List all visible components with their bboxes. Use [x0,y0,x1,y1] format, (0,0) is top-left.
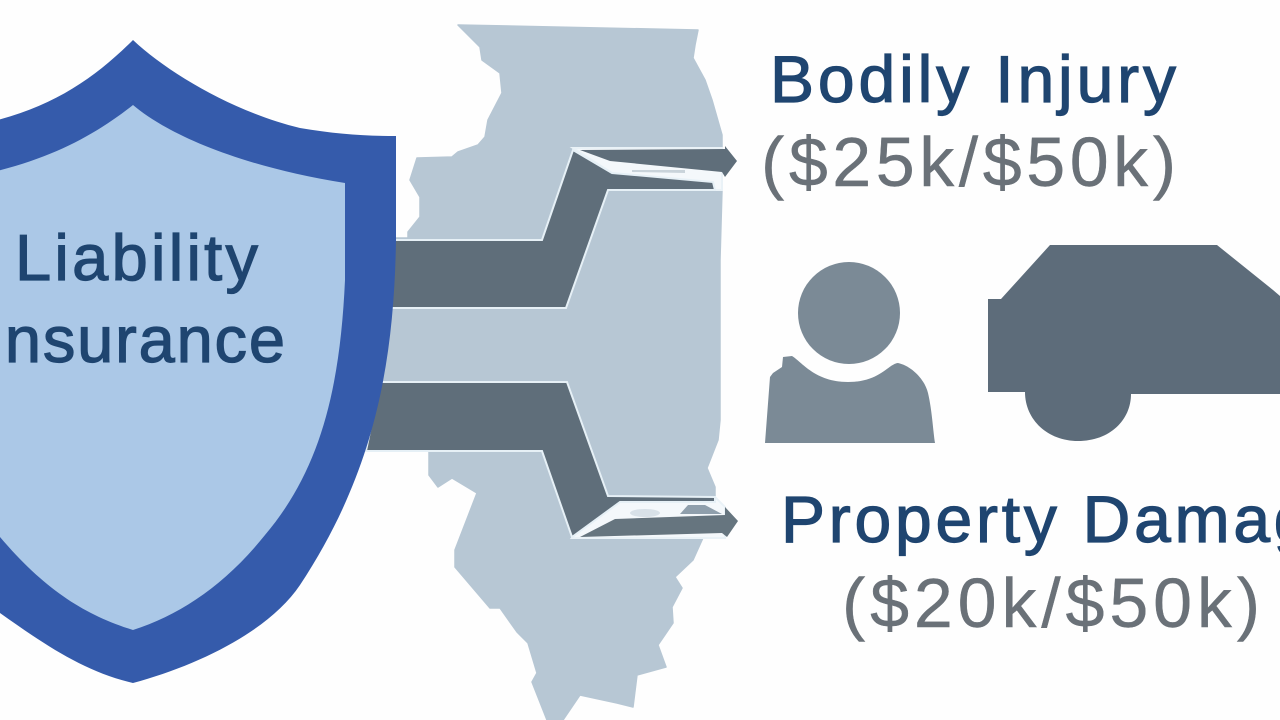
shield label: Liability: Liability [15,221,258,294]
Illinois state map [375,25,722,720]
icon: person [765,262,935,443]
shield: liability insurance [0,40,396,683]
heading: Bodily Injury: Bodily Injury [770,42,1176,116]
shield inner panel [0,105,345,630]
amount: property damage limits: ($20k/$50k) [842,564,1260,642]
arrow: upper path to bodily injury [380,146,737,308]
arrow: lower path to property damage [366,382,738,538]
amount: bodily injury limits: ($25k/$50k) [761,123,1176,201]
icon: car [988,245,1280,441]
shield outer border [0,40,396,683]
